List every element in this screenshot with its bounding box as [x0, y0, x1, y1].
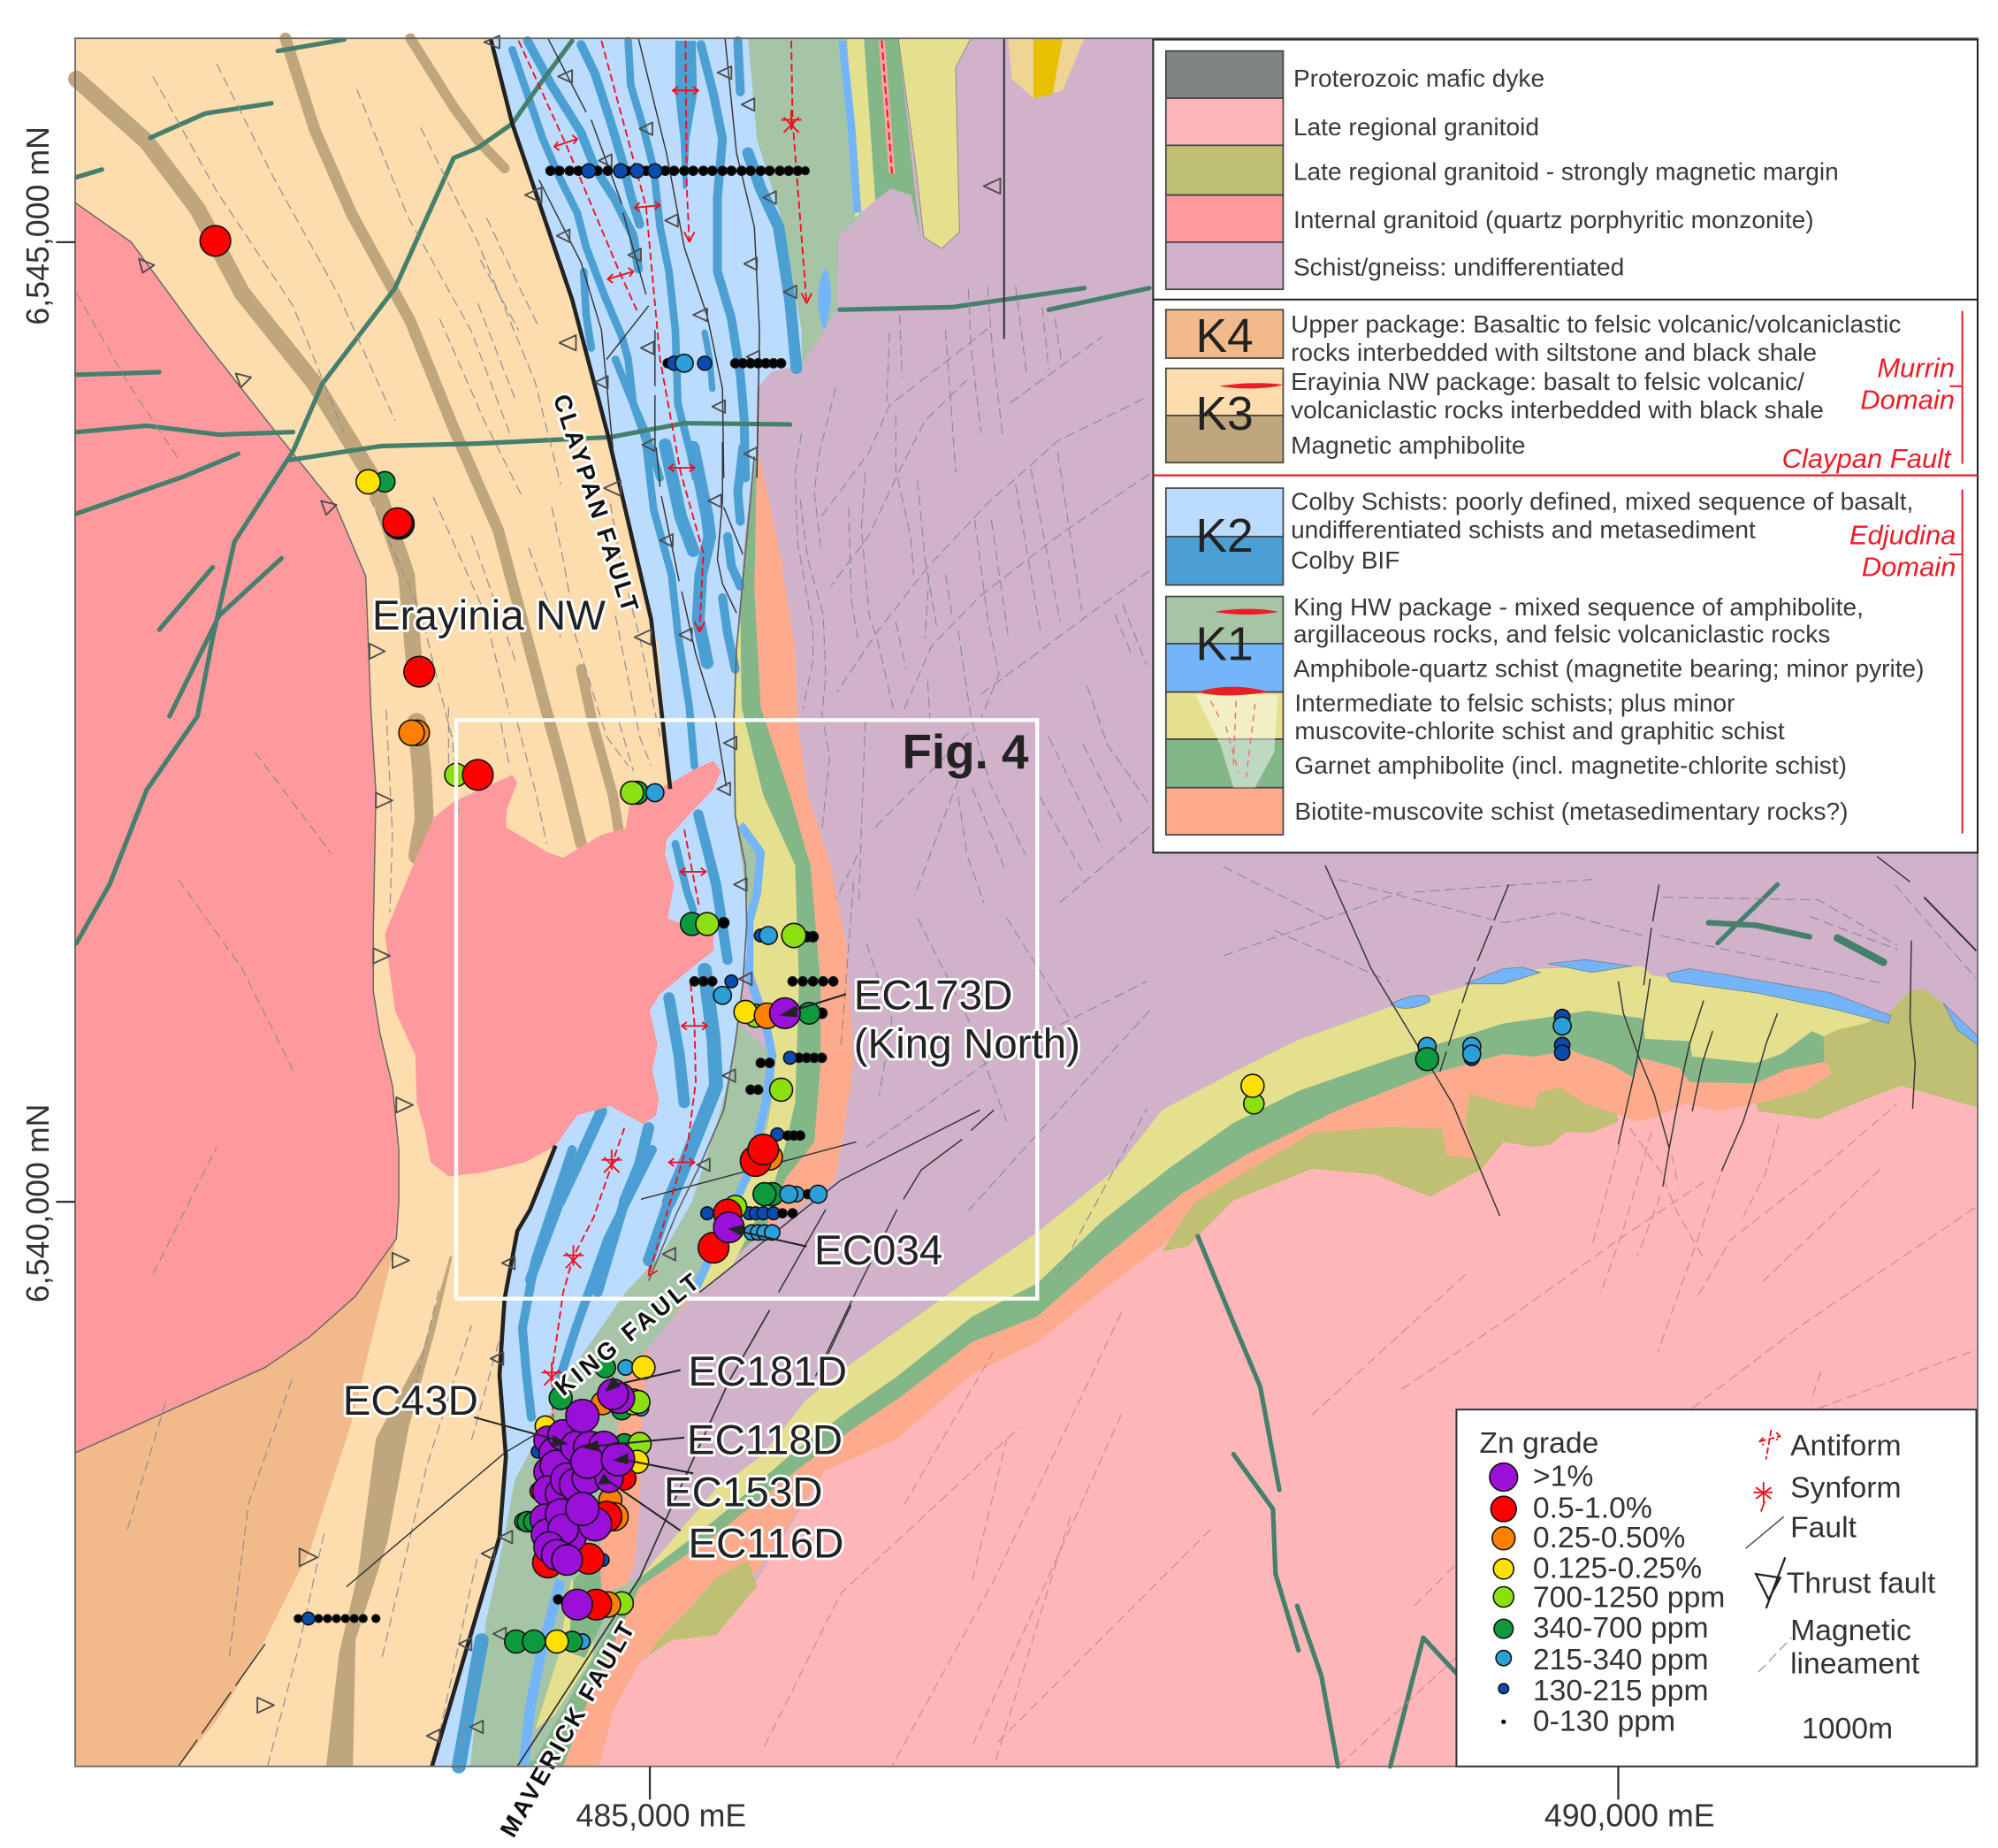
unit: yellow schist sliver north [847, 38, 875, 218]
swatch: K2 lower [1166, 537, 1283, 585]
unit: garnet amphibolite band [520, 1011, 1825, 1767]
label: 1000m: 1000m [1802, 1712, 1893, 1745]
points: Fig. 4 area [681, 913, 838, 1263]
points: south of King cluster [505, 1589, 633, 1653]
icon: antiform [1759, 1430, 1781, 1459]
swatch: K3 upper [1166, 369, 1283, 416]
grade labels: 215-340 ppm [1533, 1643, 1709, 1676]
points: Erayinia NW [200, 225, 664, 805]
label: EC118D: EC118D [687, 1417, 843, 1464]
swatch overlay: K3 lens [1219, 383, 1283, 388]
swatch overlay: massive sulphide body [1198, 687, 1270, 695]
legend text: Intermediate to felsic schists; plus minor [1294, 689, 1735, 716]
label: EC116D: EC116D [688, 1520, 844, 1567]
swatch: K2 upper [1166, 488, 1283, 537]
legend text: Amphibole-quartz schist (magnetite bearing; minor pyrite) [1293, 654, 1925, 682]
icon: magnetic lineament [1758, 1638, 1792, 1672]
legend text: Proterozoic mafic dyke [1293, 65, 1544, 92]
unit: amphibole-quartz lenses [1390, 959, 1978, 1045]
unit: lower garnet wedge [568, 1554, 604, 1658]
domain label: Edjudina Domain: Domain [1862, 552, 1956, 583]
thrust barb markers facing west [427, 35, 1000, 1742]
unit: gold pod at top [1033, 38, 1063, 98]
unit: magnetic amphibolite stripes [76, 38, 619, 855]
swatch: internal granitoid [1166, 195, 1283, 242]
unit: K4 upper package [75, 1239, 396, 1767]
unit: strongly magnetic margin east lens [1756, 989, 1978, 1119]
label: Synform: Synform [1790, 1471, 1902, 1505]
K4 label: K4 [1196, 310, 1254, 363]
unit: N-S King HW package [470, 1023, 774, 1767]
swatch: K1 garnet amphibolite [1166, 739, 1283, 788]
icon: fault [1746, 1516, 1784, 1548]
K2 label: K2 [1196, 510, 1254, 562]
points: eastern belt [1241, 1010, 1571, 1114]
panel: Zn grade legend [1456, 1409, 1976, 1767]
legend text: Upper package: Basaltic to felsic volcanic/volcaniclastic [1291, 310, 1901, 338]
thrust barb markers facing east [139, 259, 413, 1713]
points: northern drill traverse [546, 164, 809, 372]
icon: thrust fault [1756, 1557, 1785, 1608]
K3 label: K3 [1196, 388, 1254, 440]
unit: K1 north package [748, 38, 861, 366]
grade labels: 130-215 ppm [1533, 1674, 1709, 1707]
swatch: K1 felsic schist [1166, 692, 1283, 739]
label: Maverick Fault: MAVERICK FAULT [494, 1617, 640, 1842]
unit: light orange pod at top [1008, 38, 1085, 98]
legend text: Schist/gneiss: undifferentiated [1293, 253, 1624, 280]
unit: internal granitoid central [385, 761, 721, 1176]
unit: garnet sliver north [864, 38, 920, 236]
Fig. 4 inset frame [456, 720, 1037, 1299]
panel: lithology legend [1153, 40, 1978, 852]
unit: strongly magnetic margin south lens [649, 1560, 757, 1655]
unit: amphibole-quartz strip [696, 825, 772, 1288]
section divider [1153, 299, 1978, 301]
unit: K2 Colby Schists [432, 38, 802, 1767]
unit: N-S yellow strip [696, 620, 799, 1294]
claypan thrust fault [491, 38, 670, 789]
grade labels: 0.5-1.0% [1533, 1492, 1652, 1525]
antiform and synform traces [519, 41, 892, 1417]
domain label: Murrin: Murrin [1877, 353, 1955, 384]
label: King Fault: KING FAULT [549, 1268, 705, 1401]
grade labels: 340-700 ppm [1533, 1611, 1709, 1645]
label: Thrust fault: Thrust fault [1787, 1567, 1936, 1600]
label: King North: (King North) [854, 1020, 1080, 1067]
legend text: rocks interbedded with siltstone and black shale [1291, 339, 1817, 366]
unit: strongly magnetic margin west lens [1162, 1087, 1618, 1251]
swatch: late regional granitoid [1166, 98, 1283, 145]
drillhole zinc grade points [200, 164, 1571, 1653]
unit: BIF lens at synform north [675, 41, 697, 188]
unit: internal granitoid west [75, 202, 399, 1453]
legend text: King HW package - mixed sequence of amphibolite, [1293, 593, 1864, 621]
legend text: Biotite-muscovite schist (metasedimentary rocks?) [1294, 798, 1848, 825]
legend text: Garnet amphibolite (incl. magnetite-chlorite schist) [1294, 752, 1847, 779]
icon: synform [1753, 1482, 1773, 1511]
legend text: undifferentiated schists and metasediment [1291, 515, 1756, 543]
unit: N-S garnet strip [731, 448, 820, 1261]
heading: Zn grade: Zn grade [1479, 1426, 1598, 1460]
axis label: 6,540,000 mN: 6,540,000 mN [20, 1104, 56, 1302]
label: lineament: lineament [1790, 1646, 1920, 1680]
legend text: Late regional granitoid - strongly magnetic margin [1293, 157, 1839, 185]
label: Claypan Fault: CLAYPAN FAULT [548, 391, 644, 615]
label: Erayinia NW: Erayinia NW [372, 592, 606, 639]
swatch: strongly magnetic margin [1166, 145, 1283, 195]
grade labels [1533, 1460, 1725, 1737]
domain brackets [1949, 311, 1963, 834]
label: EC153D: EC153D [664, 1470, 823, 1516]
unit: amphibole lens north [818, 268, 831, 330]
unit: N-S biotite schist strip [754, 448, 854, 1230]
swatch: Proterozoic mafic dyke [1166, 51, 1283, 98]
fold markers [542, 87, 812, 1386]
label: EC034: EC034 [814, 1227, 942, 1274]
swatch: schist and gneiss [1166, 242, 1283, 289]
label: EC181D: EC181D [688, 1348, 847, 1395]
swatch overlay: alteration pipe [1195, 695, 1278, 788]
domain label: Claypan Fault: Claypan Fault [1782, 443, 1952, 474]
grade labels: 0.25-0.50% [1533, 1521, 1685, 1554]
unit: small HW lens beside blue curve [736, 825, 760, 921]
magnetic lineaments over granitoid [765, 1103, 1976, 1767]
points: King main cluster [515, 1356, 655, 1577]
swatch: K1 biotite-muscovite [1166, 788, 1283, 835]
axis label: 6,545,000 mN: 6,545,000 mN [20, 126, 56, 325]
legend text: Colby BIF [1291, 546, 1399, 574]
label: Fig. 4: Fig. 4 [902, 724, 1029, 779]
swatch overlay: K1 lens [1215, 609, 1278, 615]
legend text: volcaniclastic rocks interbedded with black shale [1291, 396, 1824, 424]
points: southern traverse [294, 1612, 380, 1625]
legend text: muscovite-chlorite schist and graphitic schist [1294, 717, 1785, 745]
axis label: 485,000 mE: 485,000 mE [576, 1798, 746, 1833]
legend text: Magnetic amphibolite [1291, 431, 1526, 459]
axis: northing and easting ticks [56, 242, 1618, 1799]
unit: lower amphibole-quartz strip [523, 1580, 561, 1765]
unit: late regional granitoid [599, 1086, 1978, 1767]
grade labels: 700-1250 ppm [1533, 1581, 1725, 1615]
grade symbols [1490, 1463, 1518, 1723]
unit: Colby BIF stripes [459, 41, 797, 1767]
unit: biotite-muscovite schist band [563, 1050, 1833, 1767]
unit: biotite sliver north [881, 41, 892, 173]
legend text: Erayinia NW package: basalt to felsic volcanic/ [1291, 368, 1804, 395]
legend text [1291, 65, 1925, 825]
southern claypan fault [432, 1146, 555, 1767]
unit: biotite schist strip near schist wedge [580, 1294, 696, 1606]
legend text: Colby Schists: poorly defined, mixed sequence of basalt, [1291, 488, 1913, 515]
domain label: Edjudina: Edjudina [1849, 519, 1956, 550]
axis label: 490,000 mE: 490,000 mE [1544, 1798, 1715, 1833]
unit: southern amphibolite lens [326, 1256, 453, 1767]
unit: yellow schist pill north [898, 38, 971, 248]
legend text: Internal granitoid (quartz porphyritic monzonite) [1293, 206, 1814, 233]
Claypan fault divider [1153, 475, 1978, 477]
label: EC173D: EC173D [854, 973, 1012, 1019]
unit: K3 Erayinia NW package [75, 38, 670, 1767]
grade labels: 0-130 ppm [1533, 1704, 1675, 1737]
swatch: K3 lower [1166, 416, 1283, 462]
grade labels: >1% [1533, 1460, 1593, 1493]
label leader lines [474, 994, 846, 1531]
legend text: argillaceous rocks, and felsic volcaniclastic rocks [1293, 620, 1830, 647]
grade labels: 0.125-0.25% [1533, 1551, 1702, 1585]
swatch: K4 [1166, 309, 1283, 358]
domain label: Murrin Domain: Domain [1860, 385, 1955, 416]
swatch overlay: alteration veinlets [1210, 701, 1255, 777]
label: Antiform: Antiform [1790, 1429, 1902, 1462]
label: Magnetic: Magnetic [1790, 1614, 1911, 1647]
K1 label: K1 [1196, 619, 1254, 671]
unit: intermediate to felsic schist band [640, 966, 1891, 1577]
legend text: Late regional granitoid [1293, 113, 1539, 141]
label: Fault: Fault [1790, 1510, 1857, 1544]
swatch: K1 amphibole-quartz [1166, 644, 1283, 692]
unit: north amphibole strip [843, 41, 858, 213]
swatch: K1 HW package [1166, 597, 1283, 644]
unit: lower yellow wedge [535, 1580, 599, 1730]
label: EC43D: EC43D [343, 1378, 478, 1424]
